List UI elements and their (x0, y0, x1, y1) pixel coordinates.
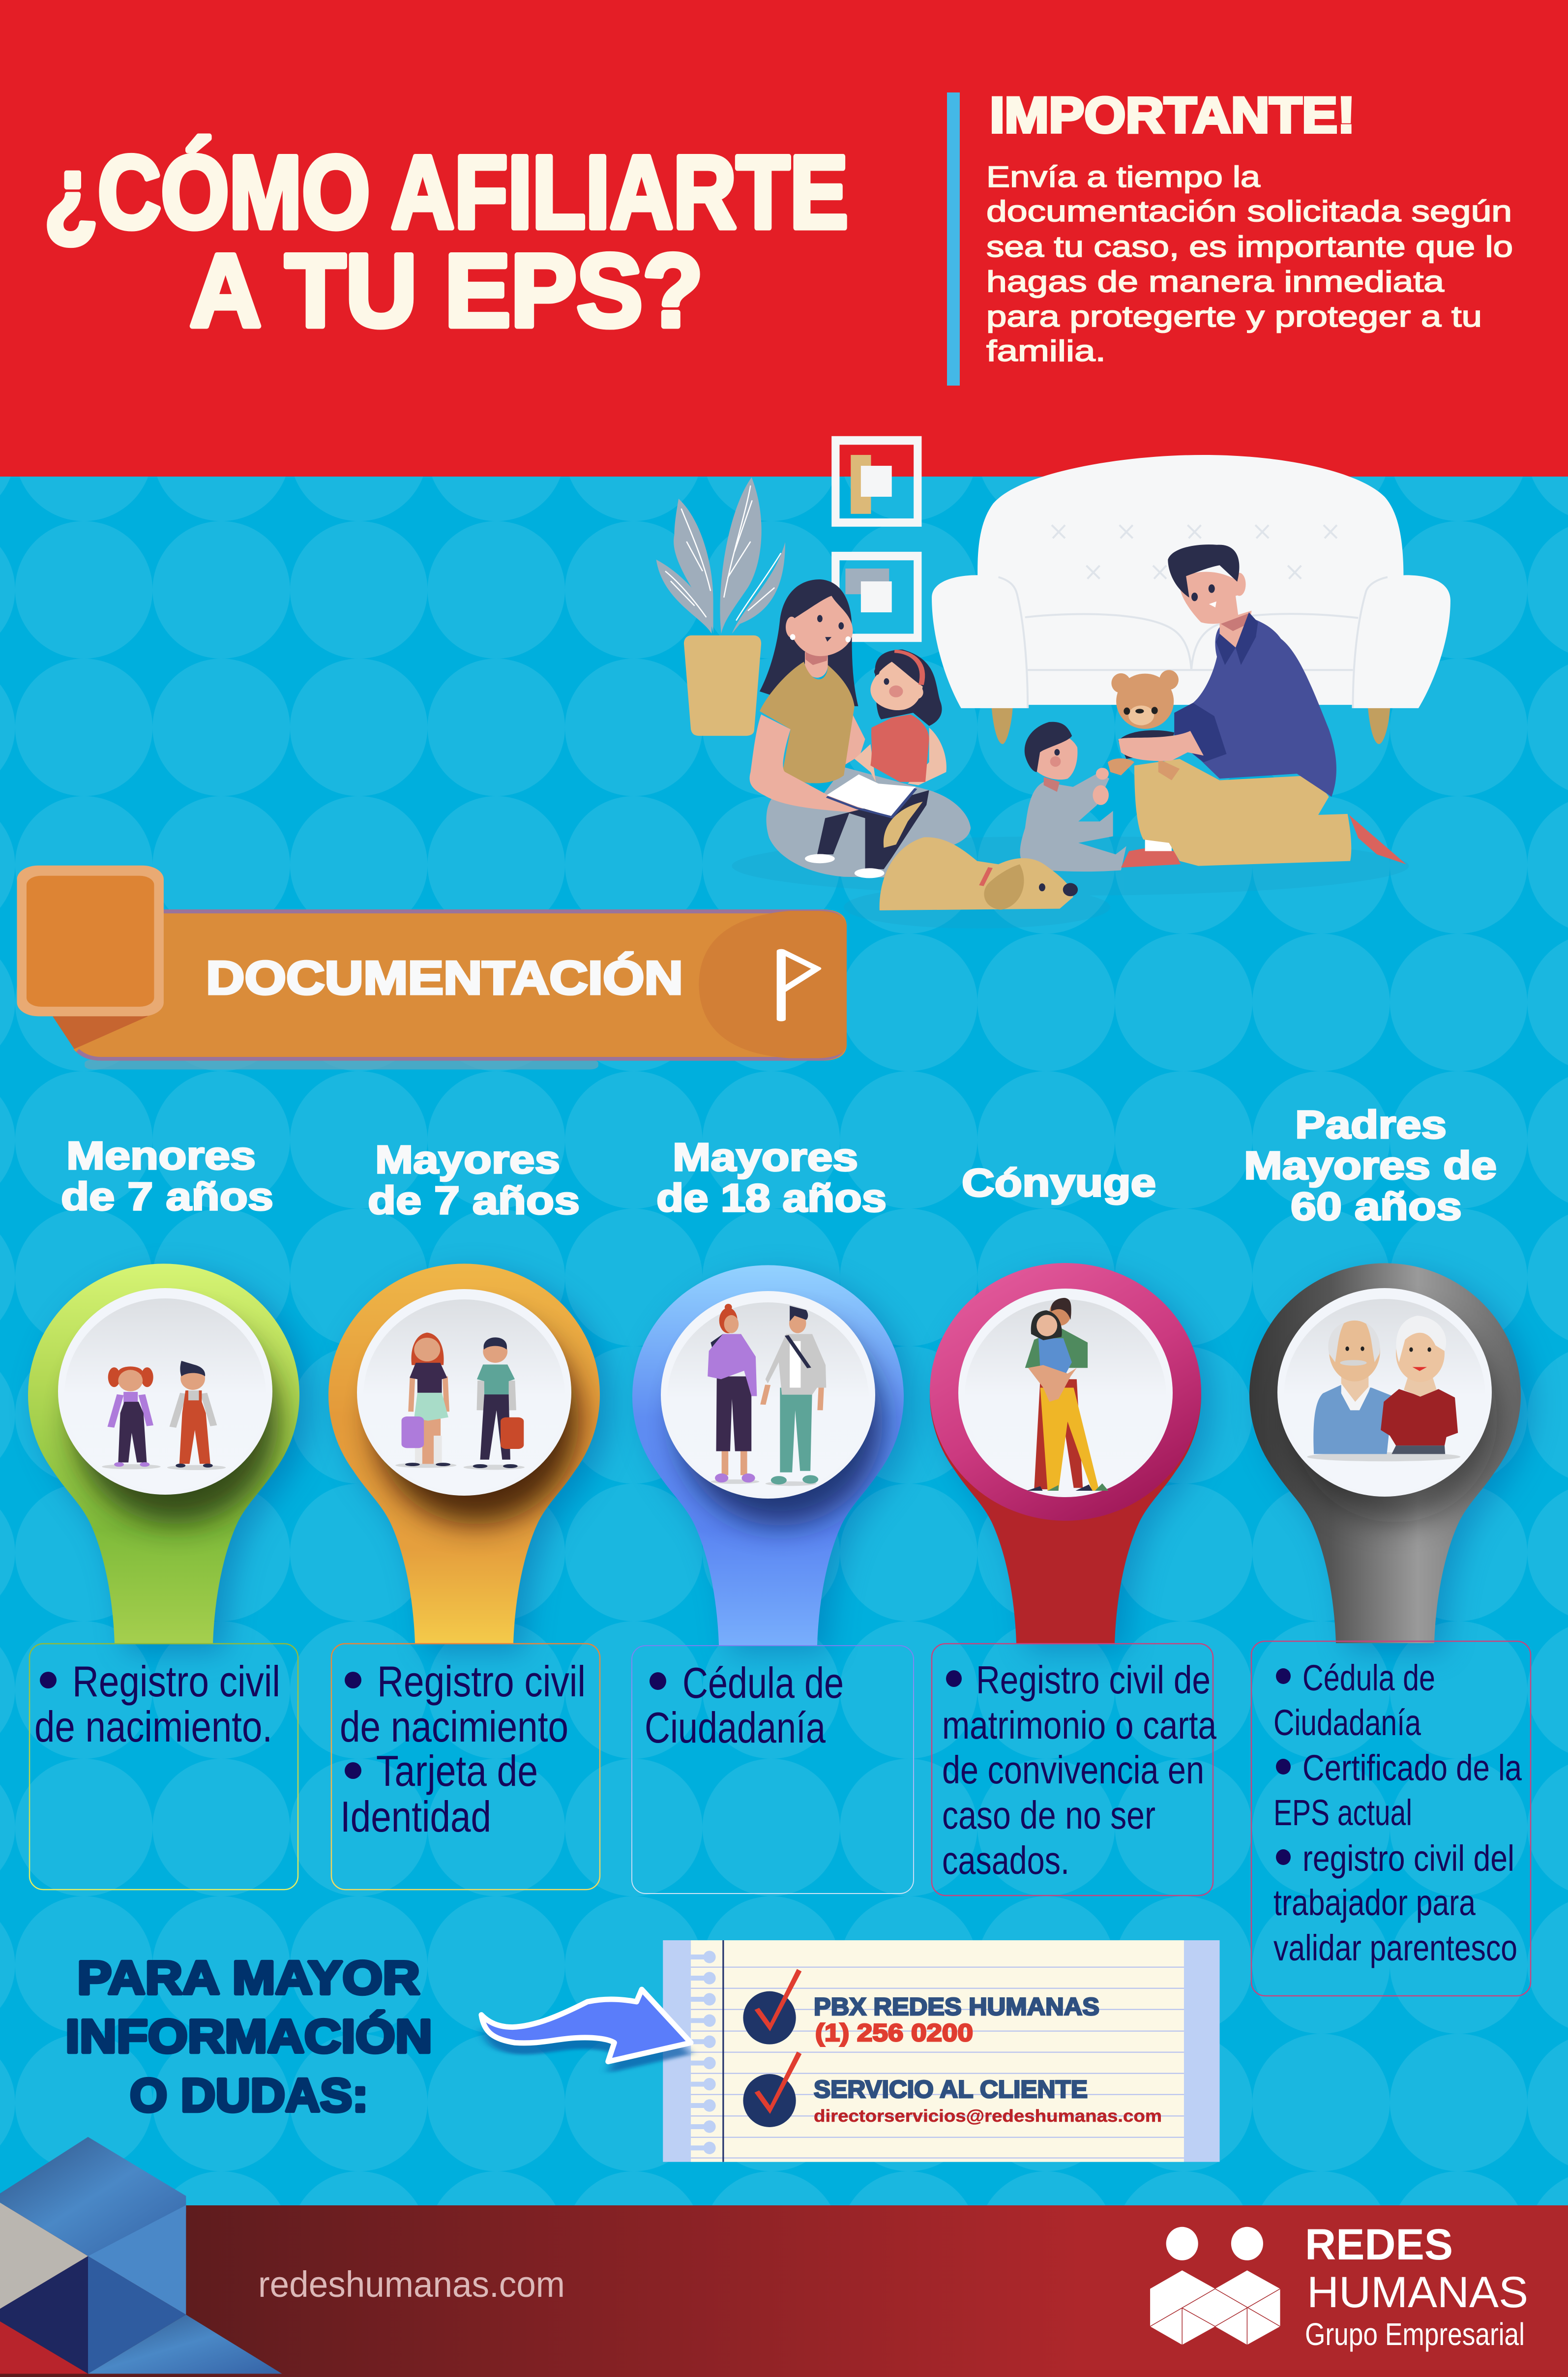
logo text: REDES (1305, 2220, 1453, 2269)
banner title: DOCUMENTACIÓN (206, 952, 683, 1004)
label: mayores de 18: Mayores (673, 1135, 858, 1179)
sofa (932, 455, 1450, 744)
title (44, 134, 848, 348)
label: mayores de 18: de 18 años (656, 1176, 887, 1220)
box 5: registro civil del (1302, 1838, 1514, 1879)
check icon 1 (743, 1969, 801, 2045)
banner square (17, 866, 164, 1016)
importante body text: hagas de manera inmediata (986, 265, 1445, 298)
spoon 2 orange (328, 1264, 611, 1653)
young adults icon (708, 1304, 826, 1486)
label: padres: Padres (1295, 1103, 1447, 1146)
logo text: HUMANAS (1307, 2267, 1528, 2317)
mother (750, 579, 971, 877)
box 5: EPS actual (1273, 1792, 1412, 1833)
box 3: Cédula de (682, 1658, 844, 1707)
label: mayores de 7: Mayores (375, 1138, 560, 1181)
importante body text: para protegerte y proteger a tu (986, 300, 1482, 333)
arrow (481, 1989, 691, 2073)
plant (656, 477, 785, 736)
box 4: Registro civil de (976, 1658, 1211, 1702)
box 1 (30, 1644, 298, 1890)
spoon 3 blue (632, 1265, 915, 1654)
spoon 5 gray (1249, 1263, 1532, 1652)
label: padres: Mayores de (1244, 1143, 1497, 1187)
box 5: Cédula de (1302, 1657, 1435, 1698)
box 4: matrimonio o carta (942, 1703, 1216, 1747)
importante body text: familia. (986, 334, 1106, 367)
footer band (0, 2205, 1568, 2377)
notebook text: directorservicios@redeshumanas.com (814, 2106, 1162, 2126)
title: ¿CÓMO AFILIARTE (44, 134, 848, 250)
daughter with book (805, 650, 947, 878)
check icon 2 (743, 2051, 801, 2127)
kids icon (102, 1361, 226, 1470)
box 4: casados. (942, 1838, 1069, 1882)
spoon 4 magenta (930, 1263, 1212, 1652)
logo text (1305, 2220, 1528, 2352)
banner shadow (85, 1059, 598, 1069)
box 5: trabajador para (1273, 1882, 1476, 1923)
box 2: Identidad (340, 1792, 491, 1841)
box 2: Tarjeta de (376, 1746, 538, 1795)
importante body text: sea tu caso, es importante que lo (986, 230, 1513, 263)
importante body text (986, 160, 1513, 367)
accent bar (947, 92, 960, 386)
label: mayores de 7 (368, 1138, 580, 1222)
banner body (48, 909, 847, 1061)
box 1: de nacimiento. (34, 1702, 272, 1751)
logo mark (1150, 2227, 1280, 2345)
box 4: caso de no ser (942, 1793, 1155, 1837)
notebook sheet (663, 1940, 1220, 2162)
box 5: Ciudadanía (1273, 1702, 1421, 1743)
documentación banner (17, 866, 847, 1069)
title: A TU EPS? (190, 233, 703, 348)
para mayor información heading: O DUDAS: (130, 2069, 368, 2122)
importante body text: documentación solicitada según (986, 195, 1512, 228)
header band (0, 0, 1568, 477)
floor shadow (732, 836, 1409, 929)
father (1121, 544, 1406, 868)
teddy bear (1108, 670, 1204, 781)
importante block (986, 87, 1513, 367)
box 4 (932, 1644, 1216, 1896)
teens icon (395, 1333, 525, 1470)
notebook text: PBX REDES HUMANAS (814, 1993, 1099, 2020)
label: menores: Menores (66, 1134, 256, 1177)
spoon 1 green (28, 1264, 310, 1653)
box 1: Registro civil (72, 1657, 280, 1706)
notebook text: SERVICIO AL CLIENTE (814, 2076, 1088, 2103)
wall frames (831, 436, 921, 642)
box 2: de nacimiento (340, 1702, 568, 1751)
notebook text: (1) 256 0200 (815, 2019, 973, 2046)
label: conyuge: Cónyuge (962, 1161, 1156, 1204)
label: menores: de 7 años (61, 1174, 273, 1218)
box 2: Registro civil (377, 1657, 586, 1706)
flag icon (781, 951, 817, 1019)
box 2 (331, 1644, 600, 1890)
category labels (61, 1103, 1497, 1228)
box 3 (632, 1646, 914, 1894)
para mayor información heading (65, 1952, 432, 2122)
logo text: Grupo Empresarial (1305, 2317, 1525, 2352)
para mayor información heading: INFORMACIÓN (65, 2010, 432, 2063)
label: menores (61, 1134, 273, 1218)
label: mayores de 18 (656, 1135, 887, 1220)
label: mayores de 7: de 7 años (368, 1178, 580, 1222)
box 4: de convivencia en (942, 1748, 1204, 1792)
importante heading: IMPORTANTE! (990, 87, 1355, 143)
notebook text (814, 1993, 1162, 2126)
box 5: Certificado de la (1302, 1747, 1522, 1788)
label: padres (1244, 1103, 1497, 1228)
couple icon (1025, 1298, 1108, 1491)
box 5: validar parentesco (1273, 1927, 1517, 1968)
elderly parents icon (1307, 1316, 1460, 1461)
family illustration (656, 436, 1450, 929)
label: padres: 60 años (1291, 1184, 1462, 1228)
importante body text: Envía a tiempo la (986, 160, 1261, 193)
box 5 (1251, 1641, 1531, 1996)
dog (880, 802, 1078, 910)
box 3: Ciudadanía (645, 1703, 826, 1752)
para mayor información heading: PARA MAYOR (77, 1952, 420, 2004)
polyhedron decoration (0, 2137, 282, 2374)
website url: redeshumanas.com (258, 2264, 565, 2305)
baby (1020, 722, 1126, 872)
